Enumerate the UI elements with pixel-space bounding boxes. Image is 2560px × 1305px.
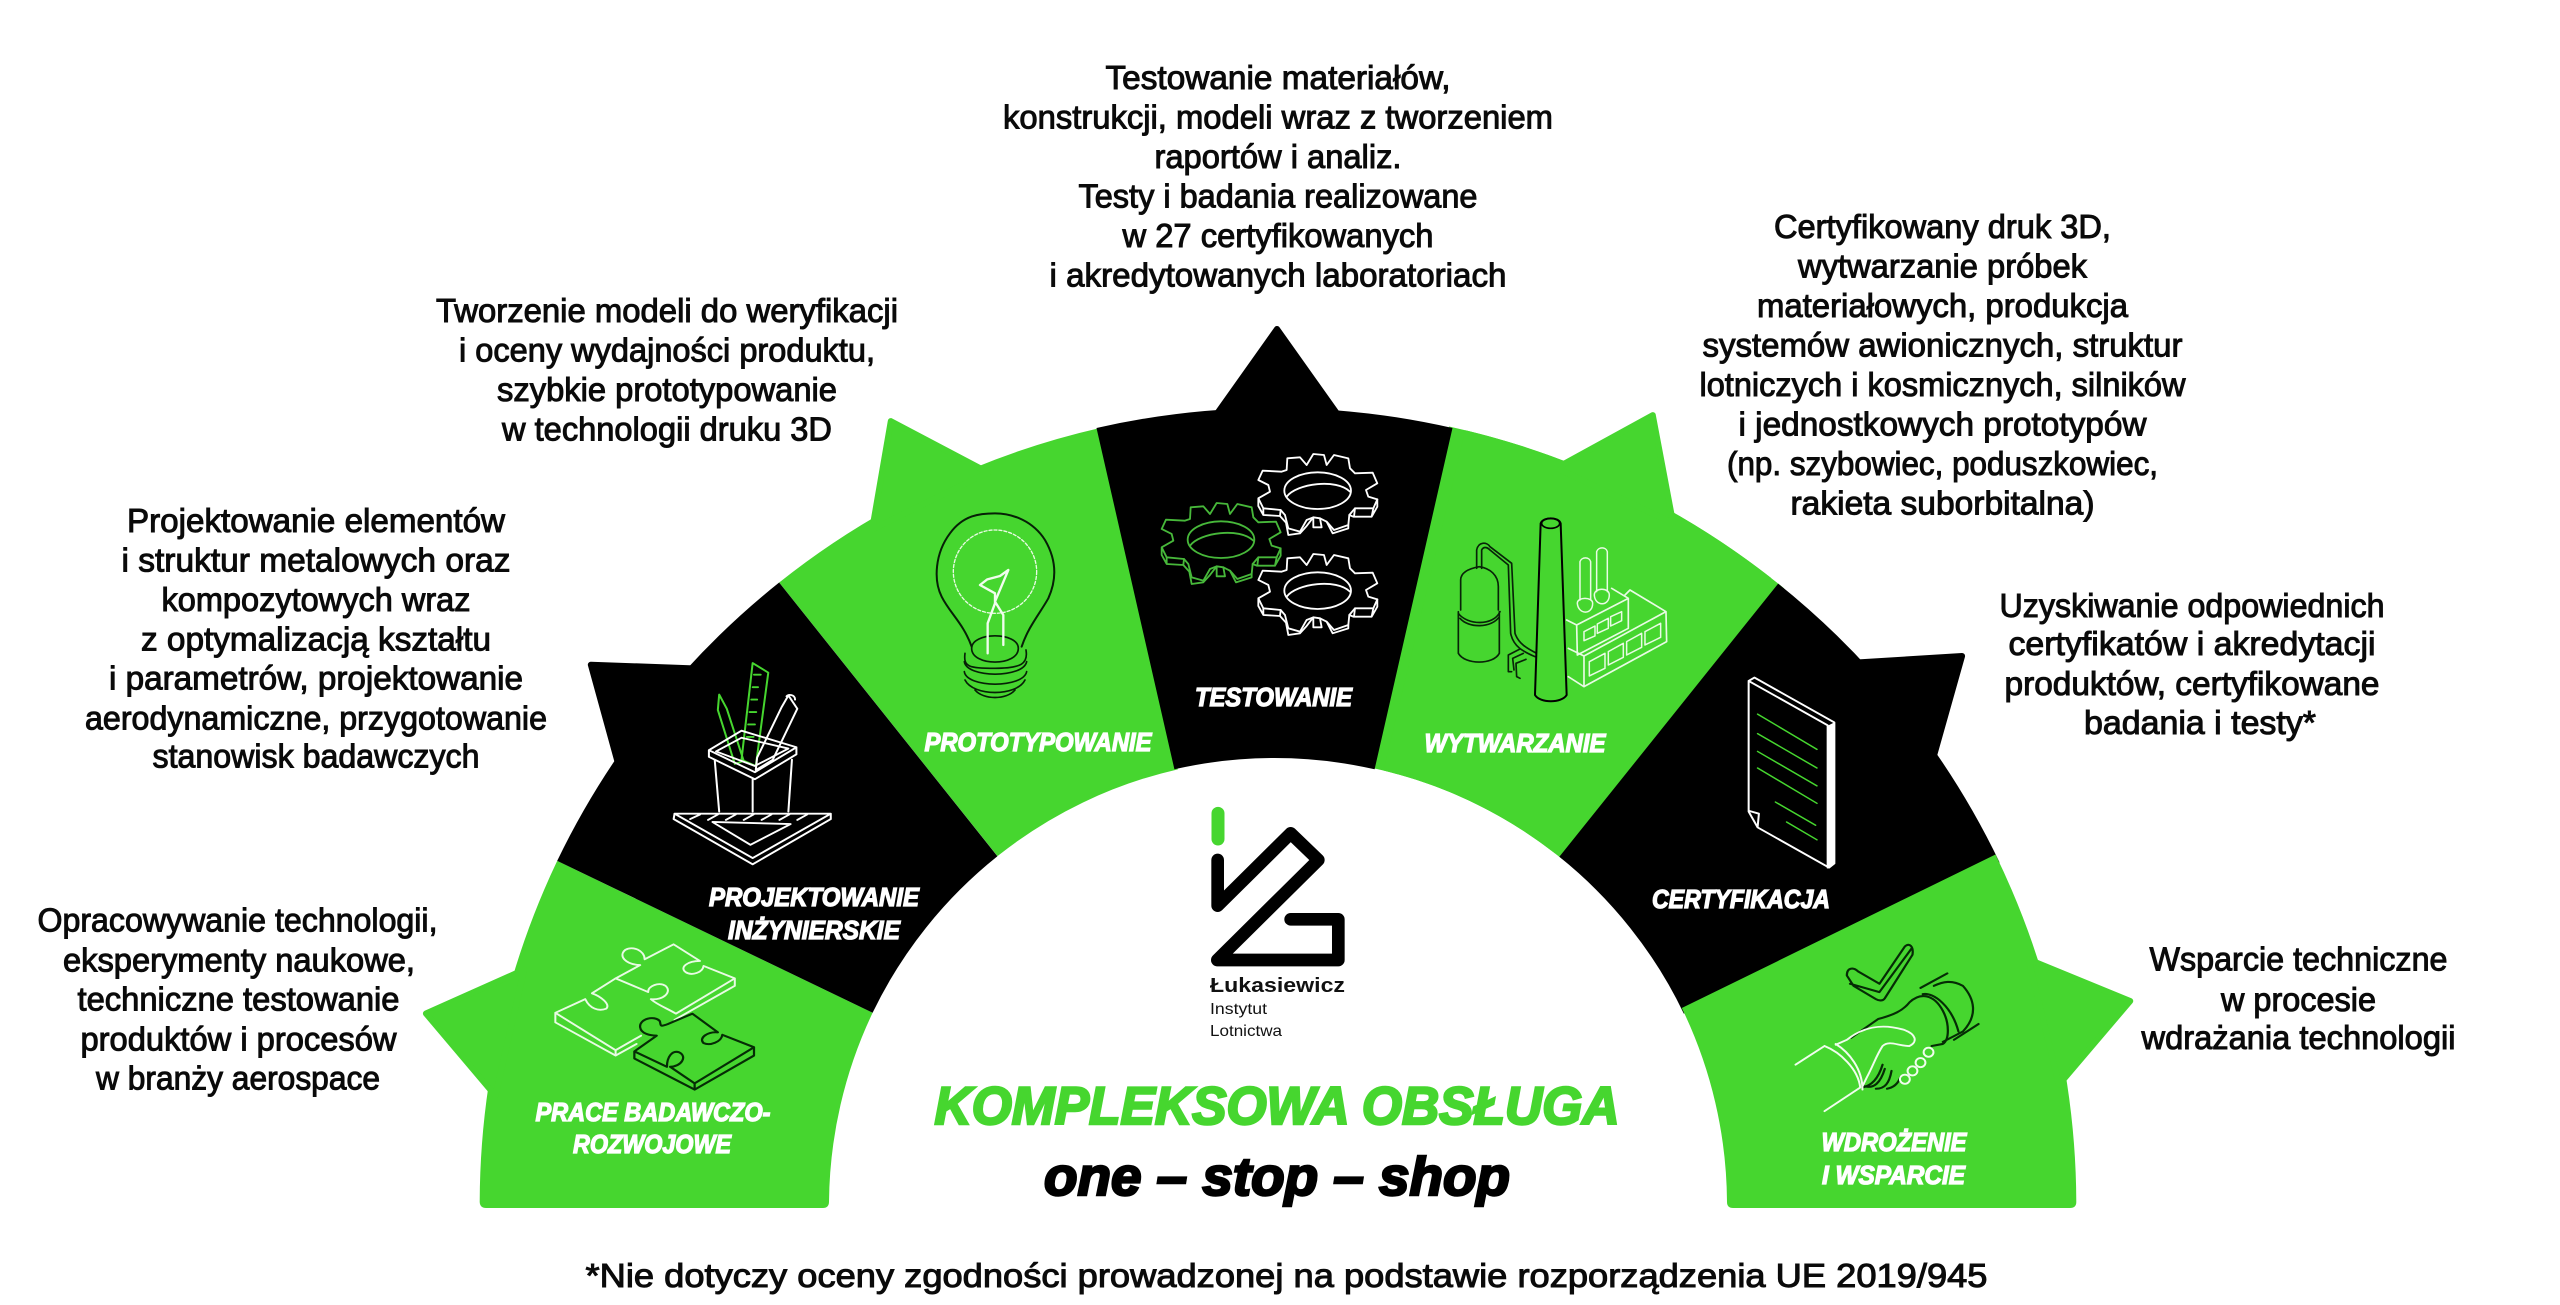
gear: white bottom [1258,554,1377,635]
icon: handshake and check [1796,945,1979,1111]
text: projektowanie: kompozytowych wraz [162,581,470,618]
text: testowanie [1003,59,1553,294]
text: wytwarzanie: lotniczych i kosmicznych, silników [1700,366,2186,403]
icon: puzzle [555,944,754,1090]
text: wytwarzanie: materiałowych, produkcja [1757,287,2129,324]
text: testowanie: Testowanie materiałów, [1106,59,1450,96]
logo mark [1217,813,1338,960]
text: wytwarzanie: i jednostkowych prototypów [1738,406,2147,442]
text: prace badawczo-rozwojowe: techniczne testowanie [78,980,400,1018]
logo text: Łukasiewicz [1210,975,1345,997]
text: wdrożenie: wdrażania technologii [2141,1019,2456,1056]
text: projektowanie: Projektowanie elementów [127,502,505,539]
text: certyfikacja: badania i testy* [2084,704,2316,741]
text: wytwarzanie: rakieta suborbitalna) [1790,484,2094,522]
logo text: Instytut [1210,1001,1268,1018]
text: prototypowanie: w technologii druku 3D [501,410,832,448]
label: wdrożenie i wsparcie [1822,1127,1967,1190]
semicircle: seven sectors [412,329,2145,1208]
text: wytwarzanie [1700,208,2186,522]
text: wytwarzanie: systemów awionicznych, struktur [1702,326,2183,364]
text: projektowanie [85,502,547,774]
text: prototypowanie: i oceny wydajności produktu, [459,332,875,368]
text: testowanie: w 27 certyfikowanych [1122,217,1434,254]
text: testowanie: Testy i badania realizowane [1078,178,1478,214]
label: certyfikacja: CERTYFIKACJA [1652,884,1830,914]
text: projektowanie: stanowisk badawczych [152,738,480,774]
sector: testowanie [1096,329,1452,769]
text: wdrożenie: w procesie [2220,981,2376,1018]
subheading: one stop shop: one – stop – shop [1044,1147,1510,1207]
label: prototypowanie: PROTOTYPOWANIE [924,727,1152,757]
gear: green left [1162,503,1281,584]
sector: certyfikacja [1511,571,2015,1075]
text: certyfikacja [2000,587,2384,741]
text: testowanie: konstrukcji, modeli wraz z tworzeniem [1003,98,1553,136]
text: certyfikacja: Uzyskiwanie odpowiednich [2000,587,2384,624]
text: prace badawczo-rozwojowe: Opracowywanie technologii, [38,902,438,938]
text: prace badawczo-rozwojowe: produktów i procesów [80,1020,397,1058]
label: projektowanie inżynierskie: PROJEKTOWANIE [709,882,920,912]
label: wdrożenie i wsparcie: WDROŻENIE [1822,1127,1967,1157]
sector: wdrożenie i wsparcie [1682,854,2145,1208]
label: projektowanie inżynierskie [709,882,920,945]
text: wytwarzanie: (np. szybowiec, poduszkowiec, [1727,445,2158,482]
text: testowanie: i akredytowanych laboratoriach [1050,256,1506,294]
gear: white top [1258,454,1377,535]
logo text: Lotnictwa [1210,1023,1282,1040]
text: prace badawczo-rozwojowe: w branży aerospace [95,1060,380,1096]
label: projektowanie inżynierskie: INŻYNIERSKIE [728,915,901,945]
label: prace badawczo-rozwojowe: PRACE BADAWCZO- [536,1097,770,1127]
text: prace badawczo-rozwojowe: eksperymenty naukowe, [63,942,415,978]
label: wdrożenie i wsparcie: I WSPARCIE [1822,1160,1966,1190]
text: certyfikacja: produktów, certyfikowane [2004,665,2380,702]
text: projektowanie: i struktur metalowych oraz [122,542,510,578]
icon: light bulb [937,513,1054,697]
label: prace badawczo-rozwojowe [536,1097,770,1159]
label: wytwarzanie: WYTWARZANIE [1424,728,1606,758]
text: projektowanie: aerodynamiczne, przygotowanie [85,700,547,736]
text: testowanie: raportów i analiz. [1154,138,1402,175]
text: projektowanie: z optymalizacją kształtu [141,620,491,658]
text: prototypowanie: szybkie prototypowanie [497,371,837,408]
text: wytwarzanie: wytwarzanie próbek [1797,248,2087,284]
icon: gears [1162,454,1377,635]
heading: kompleksowa obsługa: KOMPLEKSOWA OBSŁUGA [934,1077,1620,1136]
sector: projektowanie inżynierskie [542,570,1046,1074]
text: prototypowanie [436,292,898,448]
logo: Łukasiewicz Instytut Lotnictwa [1210,813,1345,1040]
text: wytwarzanie: Certyfikowany druk 3D, [1774,208,2111,245]
text: wdrożenie: Wsparcie techniczne [2150,940,2448,978]
icon: factory [1458,518,1667,701]
sector labels [536,682,1967,1190]
text: certyfikacja: certyfikatów i akredytacji [2008,625,2376,662]
logo text [1210,975,1345,1040]
text: wdrożenie [2141,940,2456,1056]
icon: document [1749,678,1834,868]
label: testowanie: TESTOWANIE [1195,682,1353,712]
sector: wytwarzanie [1304,388,1793,894]
sector: prace badawczo-rozwojowe [412,861,873,1208]
sector: prototypowanie [771,393,1248,890]
text: prace badawczo-rozwojowe [38,902,438,1096]
text: projektowanie: i parametrów, projektowanie [109,660,523,696]
label: prace badawczo-rozwojowe: ROZWOJOWE [573,1129,732,1159]
icon: pencil cup and set square [674,663,831,864]
footnote: *Nie dotyczy oceny zgodności prowadzonej na podstawie rozporządzenia UE 2019/945 [586,1257,1988,1294]
text: prototypowanie: Tworzenie modeli do weryfikacji [436,292,898,329]
